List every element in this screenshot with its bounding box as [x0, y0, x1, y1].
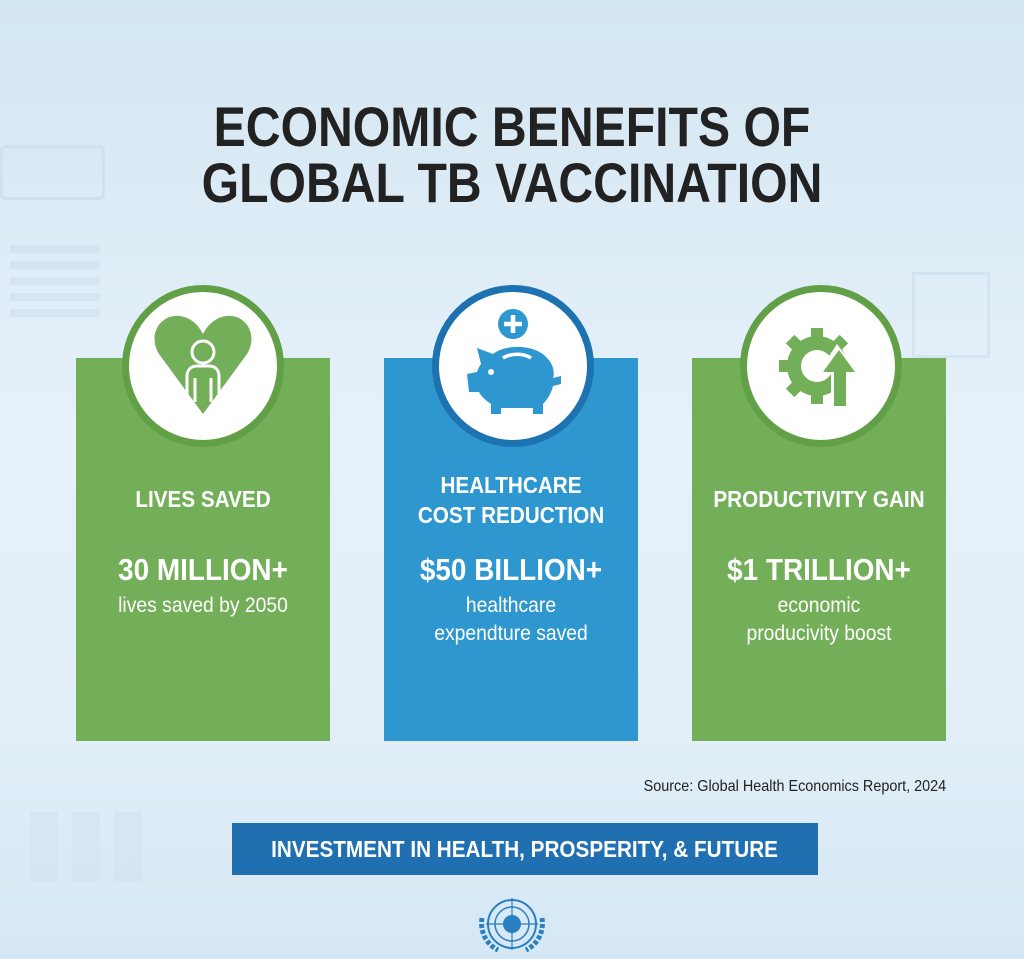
- heading: lives saved: LIVES SAVED: [135, 486, 271, 512]
- panel: productivity gain: [692, 358, 946, 741]
- icon: UN emblem: [479, 898, 545, 952]
- icon: piggy bank: [432, 285, 594, 447]
- heading: healthcare cost reduction: HEALTHCARE: [440, 472, 582, 498]
- heading: healthcare cost reduction: COST REDUCTION: [418, 502, 604, 528]
- text: healthcare expenditure saved: [434, 594, 588, 645]
- title: GLOBAL TB VACCINATION: [202, 151, 822, 214]
- text: healthcare expenditure saved: healthcare: [466, 594, 556, 617]
- panel: lives saved: [76, 358, 330, 741]
- source note: Source: Global Health Economics Report, 2024: [643, 778, 946, 795]
- stat: 30 million: 30 MILLION+: [118, 552, 288, 587]
- text: economic productivity boost: economic: [778, 594, 860, 617]
- banner: [232, 823, 818, 875]
- title: [202, 95, 822, 214]
- text: lives saved by 2050: lives saved by 2050: [118, 594, 288, 617]
- heading: productivity gain: PRODUCTIVITY GAIN: [713, 486, 925, 512]
- decorative background shapes: [0, 145, 105, 200]
- icon: gear with arrow: [740, 285, 902, 447]
- stat: 1 trillion: $1 TRILLION+: [727, 552, 911, 587]
- heading: healthcare cost reduction: [418, 472, 604, 528]
- stat: 50 billion: $50 BILLION+: [420, 552, 602, 587]
- text: economic productivity boost: [747, 594, 892, 645]
- panel: healthcare cost reduction: [384, 358, 638, 741]
- icon: heart with person: [122, 285, 284, 447]
- text: healthcare expenditure saved: expendture saved: [434, 622, 588, 645]
- text: economic productivity boost: producivity boost: [747, 622, 891, 645]
- title: ECONOMIC BENEFITS OF: [214, 95, 810, 158]
- banner: INVESTMENT IN HEALTH, PROSPERITY, & FUTURE: [272, 836, 778, 862]
